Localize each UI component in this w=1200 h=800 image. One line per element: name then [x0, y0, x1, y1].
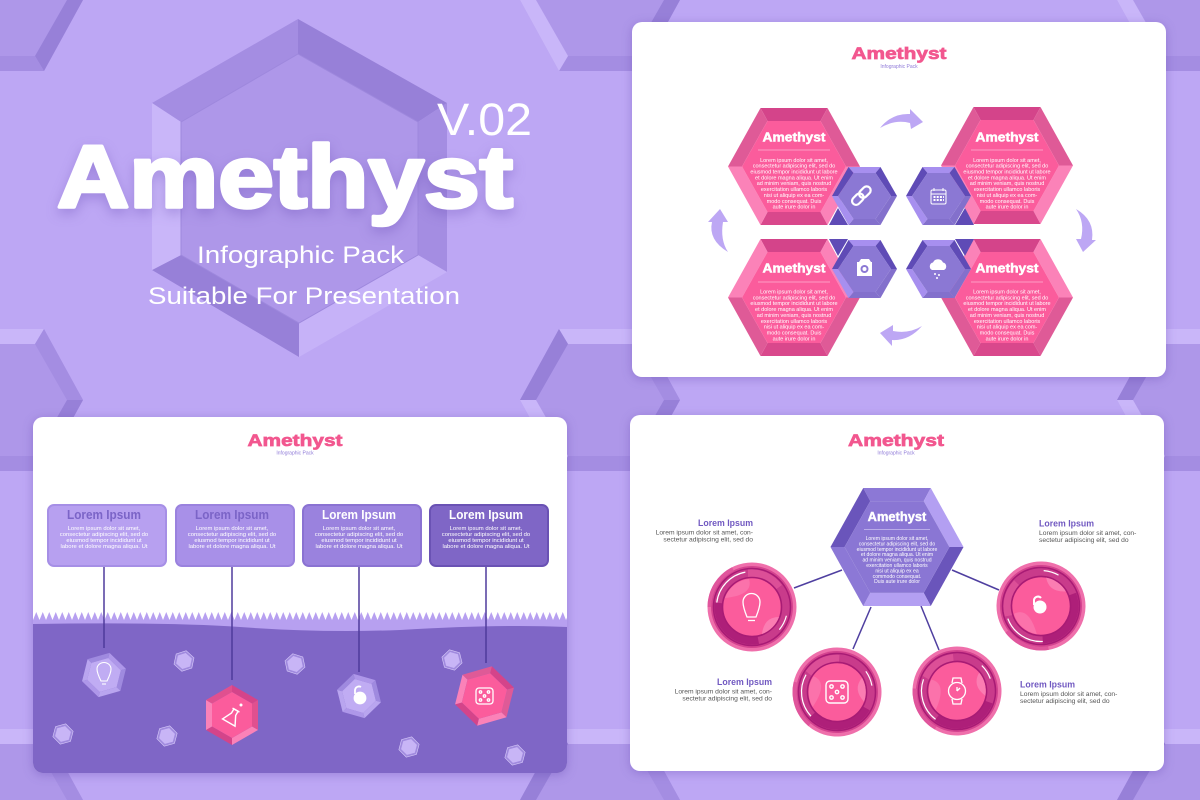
main title: Amethyst — [57, 127, 513, 226]
pink hexagon top left: eiusmod tempor incididunt ut labore — [750, 170, 838, 176]
arrow: top — [880, 109, 923, 129]
pink hexagon top right: modo consequat. Duis — [980, 199, 1035, 205]
card two: labore et dolore magna aliqua. Ut — [188, 544, 276, 550]
icon badge: calendar — [906, 167, 971, 225]
arrow: right — [1076, 209, 1096, 252]
pink hexagon top right: nisi ut aliquip ex ea com- — [977, 193, 1037, 199]
pink hexagon bottom left: eiusmod tempor incididunt ut labore — [750, 301, 838, 307]
pink hexagon bottom left: ad minim veniam, quis nostrud — [757, 313, 831, 319]
central hexagon: ad minim veniam, quis nostrud — [862, 558, 932, 564]
pink hexagon top left: exercitation ullamco laboris — [761, 187, 827, 193]
pink hexagon top left: modo consequat. Duis — [767, 199, 822, 205]
medallion: watch — [896, 630, 1018, 752]
label: bottom right: Lorem Ipsum — [1020, 680, 1075, 690]
pink hexagon top left: Lorem ipsum dolor sit amet, — [760, 158, 828, 164]
card four: eiusmod tempor incididunt ut — [448, 538, 524, 544]
card two: Lorem ipsum dolor sit amet, — [196, 526, 269, 532]
version label: V.02 — [437, 94, 532, 145]
central hexagon: nisi ut aliquip ex ea — [875, 568, 919, 574]
pink hexagon top left: ad minim veniam, quis nostrud — [757, 181, 831, 187]
pink hexagon top right: aute irure dolor in — [986, 205, 1028, 211]
pink hexagon bottom left: exercitation ullamco laboris — [761, 319, 827, 325]
card three: eiusmod tempor incididunt ut — [321, 538, 397, 544]
medallion: bulb — [708, 562, 796, 652]
card two: Lorem Ipsum — [195, 508, 269, 522]
connector lines — [794, 570, 999, 650]
card two — [176, 505, 294, 566]
arrow: bottom — [880, 325, 922, 346]
pink hexagon bottom right: nisi ut aliquip ex ea com- — [977, 325, 1037, 331]
pink hexagon top right: et dolore magna aliqua. Ut enim — [968, 175, 1046, 181]
card three: labore et dolore magna aliqua. Ut — [315, 544, 403, 550]
label: top right: Lorem Ipsum — [1039, 518, 1094, 528]
card one: Lorem Ipsum — [67, 508, 141, 522]
pink hexagon top right: Amethyst — [976, 130, 1039, 144]
small hexagons — [51, 648, 527, 767]
pink hexagon bottom right: consectetur adipiscing elit, sed do — [966, 295, 1048, 301]
label: top left: Lorem Ipsum — [698, 518, 753, 528]
subtitle line one: Infographic Pack — [197, 242, 405, 269]
panel heading: Amethyst — [248, 431, 343, 450]
pink hexagon bottom right: et dolore magna aliqua. Ut enim — [968, 307, 1046, 313]
label: bottom right: sectetur adipiscing elit, sed do — [1020, 698, 1110, 705]
label: bottom right — [1020, 680, 1117, 705]
pink hexagon bottom right: exercitation ullamco laboris — [974, 319, 1040, 325]
pink hexagon top right: ad minim veniam, quis nostrud — [970, 181, 1044, 187]
icon badge: link — [832, 167, 897, 225]
icon badge: camera — [832, 240, 897, 298]
card one: Lorem ipsum dolor sit amet, — [68, 526, 141, 532]
card four — [430, 505, 548, 566]
central hexagon: consectetur adipiscing elit, sed do — [859, 541, 935, 547]
gem: bulb — [79, 648, 129, 702]
pink hexagon bottom right: eiusmod tempor incididunt ut labore — [963, 301, 1051, 307]
gem: lock — [334, 669, 384, 723]
pink hexagon bottom left: Amethyst — [762, 260, 826, 276]
card four: Lorem Ipsum — [449, 508, 523, 522]
pink hexagon top right: Lorem ipsum dolor sit amet, — [973, 158, 1041, 164]
pink hexagon top left: consectetur adipiscing elit, sed do — [753, 164, 835, 170]
pink hexagon bottom right — [941, 239, 1073, 356]
card four: Lorem ipsum dolor sit amet, — [450, 526, 523, 532]
pink hexagon bottom left: aute irure dolor in — [773, 336, 815, 342]
central hexagon: eiusmod tempor incididunt ut labore — [857, 547, 938, 553]
label: top left — [656, 518, 753, 544]
card two: consectetur adipiscing elit, sed do — [188, 532, 277, 538]
pink hexagon top left: Amethyst — [762, 130, 826, 144]
label: bottom left: sectetur adipiscing elit, sed do — [682, 696, 772, 702]
label: top right: Lorem ipsum dolor sit amet, con- — [1039, 530, 1136, 537]
pink hexagon bottom left: modo consequat. Duis — [767, 330, 822, 336]
panel subheading: Infographic Pack — [877, 450, 915, 456]
central hexagon — [830, 488, 964, 606]
pink hexagon top left: nisi ut aliquip ex ea com- — [764, 193, 824, 199]
central hexagon: et dolore magna aliqua. Ut enim — [861, 552, 933, 558]
medallion: lock — [989, 554, 1093, 658]
pink hexagon top right — [941, 107, 1073, 225]
pink hexagon top right: eiusmod tempor incididunt ut labore — [963, 170, 1051, 176]
card three: Lorem ipsum dolor sit amet, — [323, 526, 396, 532]
pink hexagon bottom right: ad minim veniam, quis nostrud — [970, 313, 1044, 319]
panel subheading: Infographic Pack — [276, 450, 314, 456]
gem: dice — [451, 660, 518, 732]
hero title block — [57, 94, 532, 310]
card four: labore et dolore magna aliqua. Ut — [442, 544, 530, 550]
card three: Lorem Ipsum — [322, 508, 396, 522]
panel: timeline — [33, 417, 567, 773]
central hexagon: Amethyst — [868, 510, 927, 524]
icon badge: cloud — [906, 240, 971, 298]
card one: labore et dolore magna aliqua. Ut — [60, 544, 148, 550]
card one — [48, 505, 166, 566]
panel subheading: Infographic Pack — [880, 64, 918, 70]
panel: hub diagram — [630, 415, 1164, 771]
label: bottom right: Lorem ipsum dolor sit amet, con- — [1020, 691, 1117, 698]
label: top right: sectetur adipiscing elit, sed do — [1039, 537, 1129, 544]
pink hexagon bottom left: et dolore magna aliqua. Ut enim — [755, 307, 833, 313]
central hexagon: Lorem ipsum dolor sit amet, — [866, 536, 928, 542]
central hexagon: exercitation ullamco laboris — [866, 563, 928, 569]
pink hexagon top left — [728, 108, 860, 225]
medallion: dice — [774, 629, 900, 755]
connector lines — [104, 566, 486, 680]
label: bottom left: Lorem ipsum dolor sit amet, con- — [675, 688, 772, 696]
card four: consectetur adipiscing elit, sed do — [442, 532, 531, 538]
card three: consectetur adipiscing elit, sed do — [315, 532, 404, 538]
pink hexagon bottom left: Lorem ipsum dolor sit amet, — [760, 290, 828, 296]
zigzag ground — [33, 612, 567, 773]
pink hexagon top right: consectetur adipiscing elit, sed do — [966, 164, 1048, 170]
label: top left: Lorem ipsum dolor sit amet, con- — [656, 530, 753, 536]
subtitle line two: Suitable For Presentation — [148, 283, 460, 310]
pink hexagon bottom right: Amethyst — [976, 260, 1039, 276]
card three — [303, 505, 421, 566]
pink hexagon bottom right: aute irure dolor in — [986, 336, 1028, 342]
label: top right — [1039, 518, 1136, 544]
panel heading: Amethyst — [852, 44, 947, 63]
card one: eiusmod tempor incididunt ut — [66, 538, 142, 544]
label: bottom left: Lorem Ipsum — [717, 677, 772, 687]
arrow: left — [708, 209, 728, 252]
pink hexagon bottom left — [728, 239, 860, 356]
pink hexagon bottom left: consectetur adipiscing elit, sed do — [753, 295, 835, 301]
pink hexagon bottom right: modo consequat. Duis — [980, 330, 1035, 336]
pink hexagon top right: exercitation ullamco laboris — [974, 187, 1040, 193]
label: bottom left — [675, 677, 772, 702]
panel heading: Amethyst — [848, 431, 944, 450]
gem: flask — [206, 685, 258, 745]
panel: hexagon cycle — [632, 22, 1166, 377]
pink hexagon bottom left: nisi ut aliquip ex ea com- — [764, 325, 824, 331]
card two: eiusmod tempor incididunt ut — [194, 538, 270, 544]
large centre hexagon — [152, 19, 447, 357]
central hexagon: Duis aute irure dolor — [874, 579, 920, 585]
card one: consectetur adipiscing elit, sed do — [60, 532, 149, 538]
pink hexagon top left: aute irure dolor in — [773, 205, 815, 211]
central hexagon: commodo consequat. — [873, 574, 921, 580]
flask bubble — [240, 704, 242, 706]
pink hexagon top left: et dolore magna aliqua. Ut enim — [755, 175, 833, 181]
label: top left: sectetur adipiscing elit, sed do — [663, 536, 753, 544]
pink hexagon bottom right: Lorem ipsum dolor sit amet, — [973, 290, 1041, 296]
